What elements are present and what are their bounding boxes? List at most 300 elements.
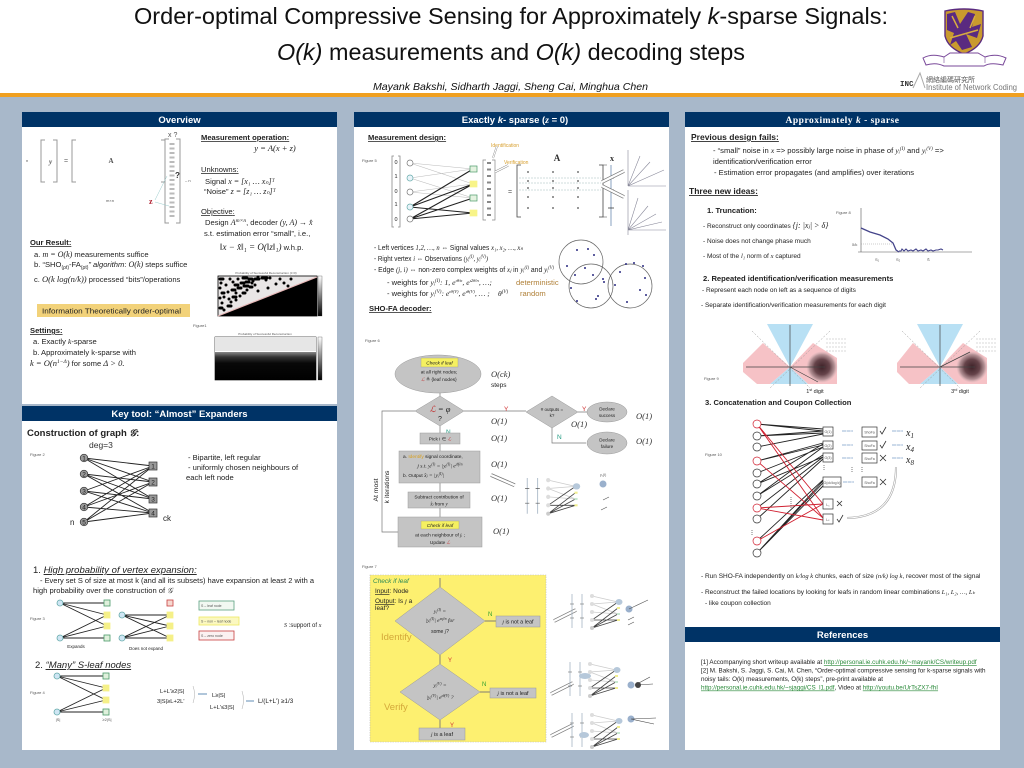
chart: phase transition, exactly sparse: [218, 271, 322, 316]
heading: approximately k-sparse: [685, 112, 1000, 127]
chart: phase transition, approximately sparse: [215, 332, 322, 380]
matrix equation figure: x ?: [168, 132, 177, 139]
flow: branch labels: Y: [504, 406, 509, 413]
branch: N to not a leaf: [488, 612, 540, 627]
decision: verify test: yᵢ: [433, 683, 437, 689]
flow: iteration label: [373, 470, 391, 503]
text: previous design fails: - Estimation error propagates (and amplifies) over iterations: [714, 168, 914, 177]
flow: declare failure: [587, 432, 627, 454]
panel background: overview: [22, 112, 337, 404]
text: graph-to-signal mapping: : 1, e: [440, 278, 456, 287]
callout: information theoretically order-optimal: Information Theoretically order-optimal: [42, 306, 181, 316]
text: objective: Objective:: [201, 207, 235, 216]
figure 2: bipartite graph: 1: [82, 456, 86, 462]
figure 10: coupon collection graph: ShoFa: [864, 457, 875, 461]
text: graph-to-signal mapping: ιθ(V): [466, 289, 475, 294]
panel: exactly k-sparse: [354, 112, 669, 750]
figure 2: bipartite graph: 3: [151, 496, 155, 504]
flow: step costs: O(ck): [491, 369, 511, 379]
figure 10: coupon collection graph: ShoFa: [864, 481, 875, 485]
text: run SHO-FA in chunks: - Run SHO-FA independently on k/log k chunks, each of size (n/k) log k, recover most of the signal: [701, 573, 981, 580]
text: SHO-FA decoder: SHO-FA decoder:: [369, 304, 432, 313]
text: measurement design: Measurement design:: [368, 133, 446, 142]
text: our result: b. “SHO: [34, 260, 61, 269]
figure 3: expansion graphs: Expands: [67, 644, 86, 649]
panel background: key tool: [22, 406, 337, 750]
text: graph-to-signal mapping: , … ;: [475, 289, 490, 298]
text: our result: [30, 238, 187, 284]
label: figure 7: Figure 7: [362, 564, 377, 569]
text: settings: ): [66, 358, 70, 368]
figure 4: S-leaf graph: |S|: [56, 717, 60, 722]
text: truncation: [703, 206, 829, 260]
decision: identify test: ιπj/n: [440, 617, 447, 621]
text: bipartite description: - Bipartite, left regular: [188, 453, 261, 462]
text: settings: 1−Δ: [57, 359, 67, 365]
text: references list: [1] Accompanying short writeup available at http://personal.ie.cuhk.edu.hk/~mayank/CS/writeup.pdf: [701, 659, 977, 666]
figure 5: measurement matrix and graph: 0: [394, 189, 398, 195]
label: figure 6: Figure 6: [365, 338, 380, 343]
text: inputs and outputs: Input: Node: [375, 588, 409, 595]
decision: verify test: |yᵢ: [427, 695, 431, 701]
branch: N to not a leaf: j is not a leaf: [501, 620, 534, 626]
legend: node types: S – leaf node: [201, 604, 222, 608]
text: run SHO-FA in chunks: - Reconstruct the failed locations by looking for leafs in random linear combinations L₁, L₂, …, Lₖ: [701, 589, 976, 596]
text: objective: m×n: [236, 218, 246, 224]
text: previous design fails: identification/verification error: [713, 157, 812, 166]
matrix equation figure: y: [48, 158, 53, 166]
matrix equation figure: – n: [185, 178, 191, 183]
text: inputs and outputs: [373, 578, 413, 612]
text: graph-to-signal mapping: ιθ(V): [449, 289, 459, 294]
figure 10: coupon collection graph: ShoFa: [864, 430, 875, 434]
branch: N to not a leaf: j is not a leaf: [496, 691, 529, 697]
branch: Y to is a leaf: j is a leaf: [430, 732, 453, 738]
text: inputs and outputs: Output: Is j a: [375, 598, 413, 605]
decision: identify test: yᵢ: [434, 609, 437, 615]
decision: verify test: [400, 664, 480, 720]
text: repeated measurements: 2. Repeated identification/verification measurements: [703, 274, 893, 283]
text: our result: -FA: [69, 260, 82, 269]
text: settings: a. Exactly k-sparse: [33, 337, 97, 346]
flow: step costs: O(1): [636, 436, 652, 446]
decision: verify test: ιθ(V): [442, 694, 450, 698]
figure 2: bipartite graph: [30, 440, 172, 527]
figure 2: bipartite graph: Figure 2: [30, 452, 45, 457]
figure 10: coupon collection graph: G(3): [824, 456, 832, 460]
figure 2: bipartite graph: deg=3: [89, 440, 113, 450]
text: references list: [701, 659, 986, 692]
decision: identify test: for: [447, 617, 455, 624]
figure 5: measurement matrix and graph: 1: [394, 174, 398, 180]
matrix equation figure: m×n: [106, 198, 114, 203]
figure 10: coupon collection graph: G(2): [824, 444, 832, 448]
flow: update leaf set: at each neighbour of jᵢ ;: [415, 532, 465, 538]
text: graph-to-signal mapping: (I): [524, 266, 529, 271]
figure 3: expansion graphs: Does not expand: [129, 646, 164, 651]
header band: [0, 0, 1024, 97]
figure 8: truncation plot: S₁: [875, 257, 880, 262]
figure 8: truncation plot: [836, 208, 972, 262]
flowchart: SHO-FA decoder: [373, 355, 652, 547]
figure 10: coupon collection graph: Lₖ: [826, 518, 830, 522]
flow: identify step: (I): [439, 472, 443, 476]
figure 10: coupon collection graph: ShoFa: [864, 444, 875, 448]
text: objective: [201, 207, 313, 252]
text: graph-to-signal mapping: - Edge (j, i) ⇔ non-zero complex weights of xⱼ in yᵢ: [374, 265, 525, 274]
figure 5: measurement matrix and graph: Figure 5: [362, 158, 377, 163]
flow: identify step: (I): [447, 462, 451, 466]
text: graph-to-signal mapping: (V): [481, 255, 486, 260]
figure 3: expansion graphs: [30, 600, 173, 651]
decision: identify test: some j?: [431, 629, 449, 635]
text: unknowns: “Noise” z = [z₁ … zₙ]ᵀ: [204, 187, 277, 196]
text: previous design fails: =>: [933, 146, 944, 155]
chart: phase transition, exactly sparse: Probability of Successful Reconstruction (z=0): [235, 271, 297, 275]
flow: iteration label: At most: [373, 478, 380, 502]
text: graph-to-signal mapping: - weights for yᵢ: [387, 278, 435, 287]
formulas: leaf node count: L+L'≥2|S|: [160, 689, 184, 695]
text: graph-to-signal mapping: - weights for yᵢ: [387, 289, 435, 298]
text: our result: (ρt): [81, 265, 89, 271]
text: unknowns: Signal x = [x₁ … xₙ]ᵀ: [205, 177, 276, 186]
heading: key tool: Key tool: “Almost” Expanders: [111, 409, 248, 420]
figure 5: measurement matrix and graph: A: [554, 153, 561, 163]
text: settings: b. Approximately k-sparse with: [33, 348, 136, 357]
text: graph-to-signal mapping: - Left vertices 1,2, …, n ⇔ Signal values x₁, x₂, …, xₙ: [374, 243, 524, 252]
flow: decision L empty: [415, 396, 464, 426]
flow: branch labels: [446, 406, 587, 441]
figure 10: coupon collection graph: 8: [910, 459, 914, 467]
flow: pick node: Pick i ∈ ℒ: [429, 436, 452, 442]
flow: decision outputs: # outputs =: [541, 407, 564, 412]
heading: references: [685, 627, 1000, 642]
text: repeated measurements: [701, 274, 893, 309]
text: truncation: 1. Truncation:: [707, 206, 757, 215]
legend: node types: S – zero node: [201, 634, 223, 638]
branch: Y to is a leaf: Y: [450, 723, 454, 729]
mini diagram: identify example: [491, 468, 609, 516]
mini diagram: identify example: y₁(I): [600, 473, 606, 477]
text: previous design fails: Previous design fails:: [691, 132, 779, 142]
flow: declare failure: failure: [601, 444, 614, 449]
text: graph-to-signal mapping: , …;: [479, 278, 492, 287]
flow: subtract contribution: [408, 492, 470, 508]
text: references list: http://personal.ie.cuhk.edu.hk/~sjaggi/CS_l1.pdf, Video at http://youtu.be/UrTsZX7-fhI: [701, 684, 938, 692]
formulas: leaf node count: L≥|S|: [212, 693, 225, 699]
text: settings: k = O(n: [30, 358, 70, 368]
flow: decision L empty: ?: [438, 416, 442, 423]
figure 10: coupon collection graph: x: [906, 455, 910, 466]
text: measurement operation: Measurement operation:: [201, 133, 289, 142]
figure 9: third digit phase diagram: [897, 324, 996, 395]
flow: step costs: [491, 369, 652, 536]
connectors: check if leaf: [440, 578, 496, 728]
text: settings: [30, 326, 136, 368]
text: measurement operation: [201, 133, 296, 153]
figure 5: measurement matrix and graph: 1: [394, 202, 398, 208]
text: previous design fails: [691, 132, 944, 177]
matrix equation figure: ?: [175, 171, 180, 180]
flow: identify step: |: [443, 473, 444, 479]
text: identify: Identify: [381, 632, 412, 643]
text: settings: Settings:: [30, 326, 62, 335]
flow: subtract contribution: x̂ⱼ from y: [429, 502, 449, 508]
figure 9: third digit phase diagram: rd: [954, 388, 957, 392]
text: verify: Verify: [384, 702, 408, 713]
decision: verify test: | e: [436, 695, 442, 701]
figure 4: S-leaf graph: ≥2|S|: [102, 717, 112, 722]
flow: identify step: j s.t. yᵢ: [417, 464, 431, 470]
panel: overview: [22, 112, 337, 404]
flow: branch labels: N: [446, 429, 451, 436]
decision: identify test: (I): [437, 608, 442, 612]
matrix equation figure: n: [26, 158, 28, 163]
panel background: exactly k-sparse: [354, 112, 669, 750]
flow: branch labels: N: [557, 434, 562, 441]
flow: decision L empty: ℒ = φ: [430, 404, 451, 414]
figure 10: coupon collection graph: 1: [910, 432, 914, 440]
text: graph-to-signal mapping: - Right vertex i ⇔ Observations (yᵢ: [374, 254, 472, 263]
logo: university crest: [923, 9, 1006, 66]
text: high probability of vertex expansion: [33, 565, 315, 595]
figure 4: S-leaf graph: Figure 4: [30, 690, 45, 695]
flow: identify step: (I): [431, 462, 436, 466]
logo: Institute of Network Coding: 網絡編碼研究所: [926, 75, 975, 84]
text: references list: [2] M. Bakshi, S. Jaggi, S. Cai, M. Chen, “Order-optimal compressive sensing for k-sparse signals with: [701, 668, 986, 674]
flow: decision outputs: [526, 396, 578, 428]
text: construction of graph: Construction of graph 𝒢:: [27, 428, 139, 439]
decision: identify test: |yᵢ: [426, 618, 430, 624]
text: bipartite description: each left node: [186, 473, 234, 482]
logo: Institute of Network Coding: [900, 73, 1017, 92]
heading: three new ideas: Three new ideas:: [689, 186, 758, 196]
panel background: approximately k-sparse: [685, 112, 1000, 750]
text: high probability of vertex expansion: 1. High probability of vertex expansion:: [33, 565, 197, 576]
flow: identify step: = |yᵢ: [435, 464, 447, 470]
text: graph-to-signal mapping: and: [529, 265, 544, 274]
text: previous design fails: - “small” noise in x => possibly large noise in phase of yᵢ: [713, 146, 900, 155]
text: unknowns: [201, 165, 277, 196]
text: inputs and outputs: Check if leaf: [373, 578, 410, 585]
figure 2: bipartite graph: 2: [82, 472, 86, 478]
figure 3: expansion graphs: Figure 3: [30, 616, 45, 621]
figure 2: bipartite graph: ck: [163, 514, 172, 523]
text: graph-to-signal mapping: (V): [502, 290, 508, 295]
branch: Y to is a leaf: [419, 723, 465, 740]
text: our result: a. m = O(k) measurements suffice: [34, 250, 149, 259]
decision: identify test: [395, 587, 485, 655]
text: objective: , decoder: [246, 218, 280, 227]
text: graph-to-signal mapping: , e: [458, 289, 466, 298]
text: previous design fails: (I): [900, 147, 905, 152]
mini diagrams: leaf check examples: [551, 594, 656, 749]
logo: Institute of Network Coding: Institute of Network Coding: [926, 83, 1017, 92]
figure 5: measurement matrix and graph: 0: [394, 217, 398, 223]
panel: key tool: [22, 406, 337, 750]
flow: step costs: O(1): [493, 526, 509, 536]
text: support of x: S :support of x: [284, 623, 322, 629]
text: measurement operation: y = A(x + z): [253, 143, 296, 153]
diagram: overlapping circles: [559, 240, 652, 308]
figure 8: truncation plot: Figure 8: [836, 210, 851, 215]
flow: decision outputs: k?: [550, 413, 555, 418]
figure 5: measurement matrix and graph: 0: [394, 160, 398, 166]
callout: information theoretically order-optimal: [37, 304, 190, 317]
chart: phase transition, approximately sparse: Probability of Successful Reconstruction: [238, 332, 292, 336]
figure 2: bipartite graph: 5: [82, 520, 86, 526]
text: graph-to-signal mapping: ι2θ/n: [470, 278, 480, 283]
figure 5: measurement matrix and graph: Identification: [491, 143, 519, 149]
text: graph-to-signal mapping: : e: [441, 289, 450, 298]
formulas: leaf node count: L+L'≤3|S|: [210, 705, 234, 711]
text: references list: noisy tails: O(k) measurements, O(k) steps”, pre-print available at: [701, 676, 883, 683]
heading: references: References: [817, 630, 868, 641]
matrix equation figure: =: [64, 158, 68, 165]
decision: identify test: =: [441, 609, 446, 615]
figure 8: truncation plot: S₂: [896, 257, 901, 262]
figure 2: bipartite graph: 4: [151, 510, 155, 518]
text: unknowns: Unknowns:: [201, 165, 239, 174]
matrix equation figure: A: [108, 157, 114, 165]
text: graph-to-signal mapping: , yᵢ: [474, 254, 481, 263]
figure 10: coupon collection graph: G(1): [824, 430, 832, 434]
text: our result: Our Result:: [30, 238, 71, 247]
figure 9: first digit phase diagram: st: [809, 388, 812, 392]
flow: declare failure: Declare: [599, 438, 615, 442]
text: graph-to-signal mapping: (V): [435, 290, 442, 295]
text: graph-to-signal mapping: deterministic: [516, 278, 559, 287]
figure 10: coupon collection graph: 4: [910, 446, 914, 454]
flow: identify step: [399, 451, 480, 483]
flow: declare success: success: [599, 413, 616, 418]
figure 10: coupon collection graph: x: [906, 442, 910, 453]
figure 5: measurement matrix and graph: Verification: [504, 160, 529, 166]
branch: N to not a leaf: [482, 682, 536, 698]
text: truncation: - Most of the l₁ norm of x captured: [703, 253, 801, 260]
text: objective: Design A: [205, 218, 236, 227]
flow: pick node: [420, 433, 460, 444]
figure 10: coupon collection graph: x: [906, 428, 910, 439]
flow: identify step: a. Identify signal coordinate,: [403, 454, 463, 460]
flow: step costs: steps: [491, 382, 507, 389]
figure 5: measurement matrix and graph: x: [610, 154, 614, 163]
text: graph-to-signal mapping: ιθ/n: [455, 278, 463, 283]
flow: start ellipse: ℒ ≜ {leaf nodes}: [421, 376, 457, 383]
heading: exactly k-sparse: [354, 112, 669, 127]
text: repeated measurements: - Separate identification/verification measurements for each digit: [701, 302, 886, 309]
text: graph-to-signal mapping: [374, 243, 559, 298]
figure 9: third digit phase diagram: digit: [957, 389, 969, 395]
flow: declare success: [587, 402, 627, 422]
text: graph-to-signal mapping: yᵢ: [543, 265, 554, 274]
branch: N to not a leaf: N: [488, 612, 492, 618]
flow: update leaf set: [398, 517, 482, 547]
flow: connectors: [382, 393, 587, 532]
decision: verify test: ?: [449, 695, 454, 701]
flow: identify step: | e: [450, 464, 456, 470]
text: run SHO-FA in chunks: [701, 573, 981, 607]
figure 9: third digit phase diagram: 3: [951, 389, 954, 395]
text: objective: ‖x − x̂‖₁ = O(‖z‖₁) w.h.p.: [220, 242, 303, 252]
text: graph-to-signal mapping: (I): [435, 279, 440, 284]
text: concatenation heading: 3. Concatenation and Coupon Collection: [705, 398, 852, 407]
figure 5: measurement matrix and graph: =: [508, 189, 512, 196]
figure 8: truncation plot: S̄: [927, 257, 930, 262]
text: objective: s.t. estimation error “small”, i.e.,: [204, 229, 310, 238]
flow: branch labels: Y: [582, 406, 587, 413]
text: truncation: - Noise does not change phase much: [703, 238, 811, 245]
heading: approximately k-sparse: Approximately k - sparse: [786, 116, 899, 126]
authors: Mayank Bakshi, Sidharth Jaggi, Sheng Cai, Minghua Chen: [373, 81, 648, 93]
text: graph-to-signal mapping: ): [485, 254, 488, 263]
text: high probability of vertex expansion: - Every set S of size at most k (and all its subsets) have expansion at least 2 with a: [40, 576, 315, 585]
title: Order-optimal Compressive Sensing for Approximately k-sparse Signals:: [134, 3, 888, 29]
flowchart: check if leaf: [370, 575, 546, 742]
formulas: leaf node count: [157, 686, 294, 711]
legend: node types: [199, 601, 239, 640]
flow: update leaf set: Check if leaf: [427, 523, 454, 529]
text: previous design fails: yᵢ: [921, 146, 933, 155]
text: our result: c. O(k log(n/k)) processed “bits”/operations: [34, 274, 181, 284]
panel: approximately k-sparse: [685, 112, 1000, 750]
text: our result: : O(k) steps suffice: [124, 260, 187, 269]
branch: N to not a leaf: N: [482, 682, 486, 688]
flow: step costs: O(1): [636, 411, 652, 421]
flow: subtract contribution: Subtract contribution of: [414, 494, 464, 500]
text: repeated measurements: - Represent each node on left as a sequence of digits: [702, 287, 857, 294]
text: previous design fails: and: [905, 146, 922, 155]
text: previous design fails: (V): [926, 147, 933, 152]
figure 4: S-leaf graph: [30, 673, 112, 722]
text: bipartite description: - uniformly chosen neighbours of: [188, 463, 299, 472]
flow: iteration label: k iterations: [384, 470, 391, 503]
text: settings: for some Δ > 0.: [72, 358, 124, 368]
title: O(k) measurements and O(k) decoding steps: [277, 39, 745, 65]
text: graph-to-signal mapping: θ: [498, 289, 502, 298]
figure 2: bipartite graph: 2: [151, 480, 155, 486]
figure 5: measurement matrix and graph: [362, 143, 666, 235]
flow: step costs: O(1): [491, 459, 507, 469]
heading: key tool: [22, 406, 337, 421]
flow: step costs: O(1): [571, 419, 587, 429]
decision: verify test: (V): [431, 694, 437, 698]
flow: step costs: O(1): [491, 433, 507, 443]
matrix equation figure: [26, 132, 191, 223]
text: graph-to-signal mapping: (I): [470, 255, 474, 260]
branch: Y: Y: [448, 658, 452, 664]
text: truncation: - Reconstruct only coordinates {j: |xⱼ| > δ}: [703, 221, 829, 230]
figure 2: bipartite graph: 1: [151, 464, 155, 470]
decision: identify test: (I): [430, 617, 435, 621]
decision: verify test: =: [442, 683, 447, 689]
formulas: leaf node count: L/(L+L') ≥1/3: [258, 698, 294, 705]
figure 10: coupon collection graph: G(ck/log k): [824, 481, 840, 485]
text: our result: (ρt): [61, 265, 69, 271]
flow: identify step: b. Output x̂ⱼ = |yᵢ: [403, 473, 439, 479]
text: graph-to-signal mapping: (V): [548, 266, 554, 271]
heading: overview: Overview: [158, 115, 201, 126]
figure 2: bipartite graph: 3: [82, 488, 86, 496]
flow: step costs: O(1): [491, 493, 507, 503]
flow: start ellipse: Check if leaf: [426, 360, 453, 366]
figure 9: first digit phase diagram: [743, 324, 846, 395]
heading: overview: [22, 112, 337, 127]
text: graph-to-signal mapping: , e: [462, 278, 470, 287]
figure 10: coupon collection graph: [752, 420, 914, 557]
flow: declare success: Declare: [599, 406, 615, 412]
text: our result: ” algorithm: [88, 260, 124, 269]
